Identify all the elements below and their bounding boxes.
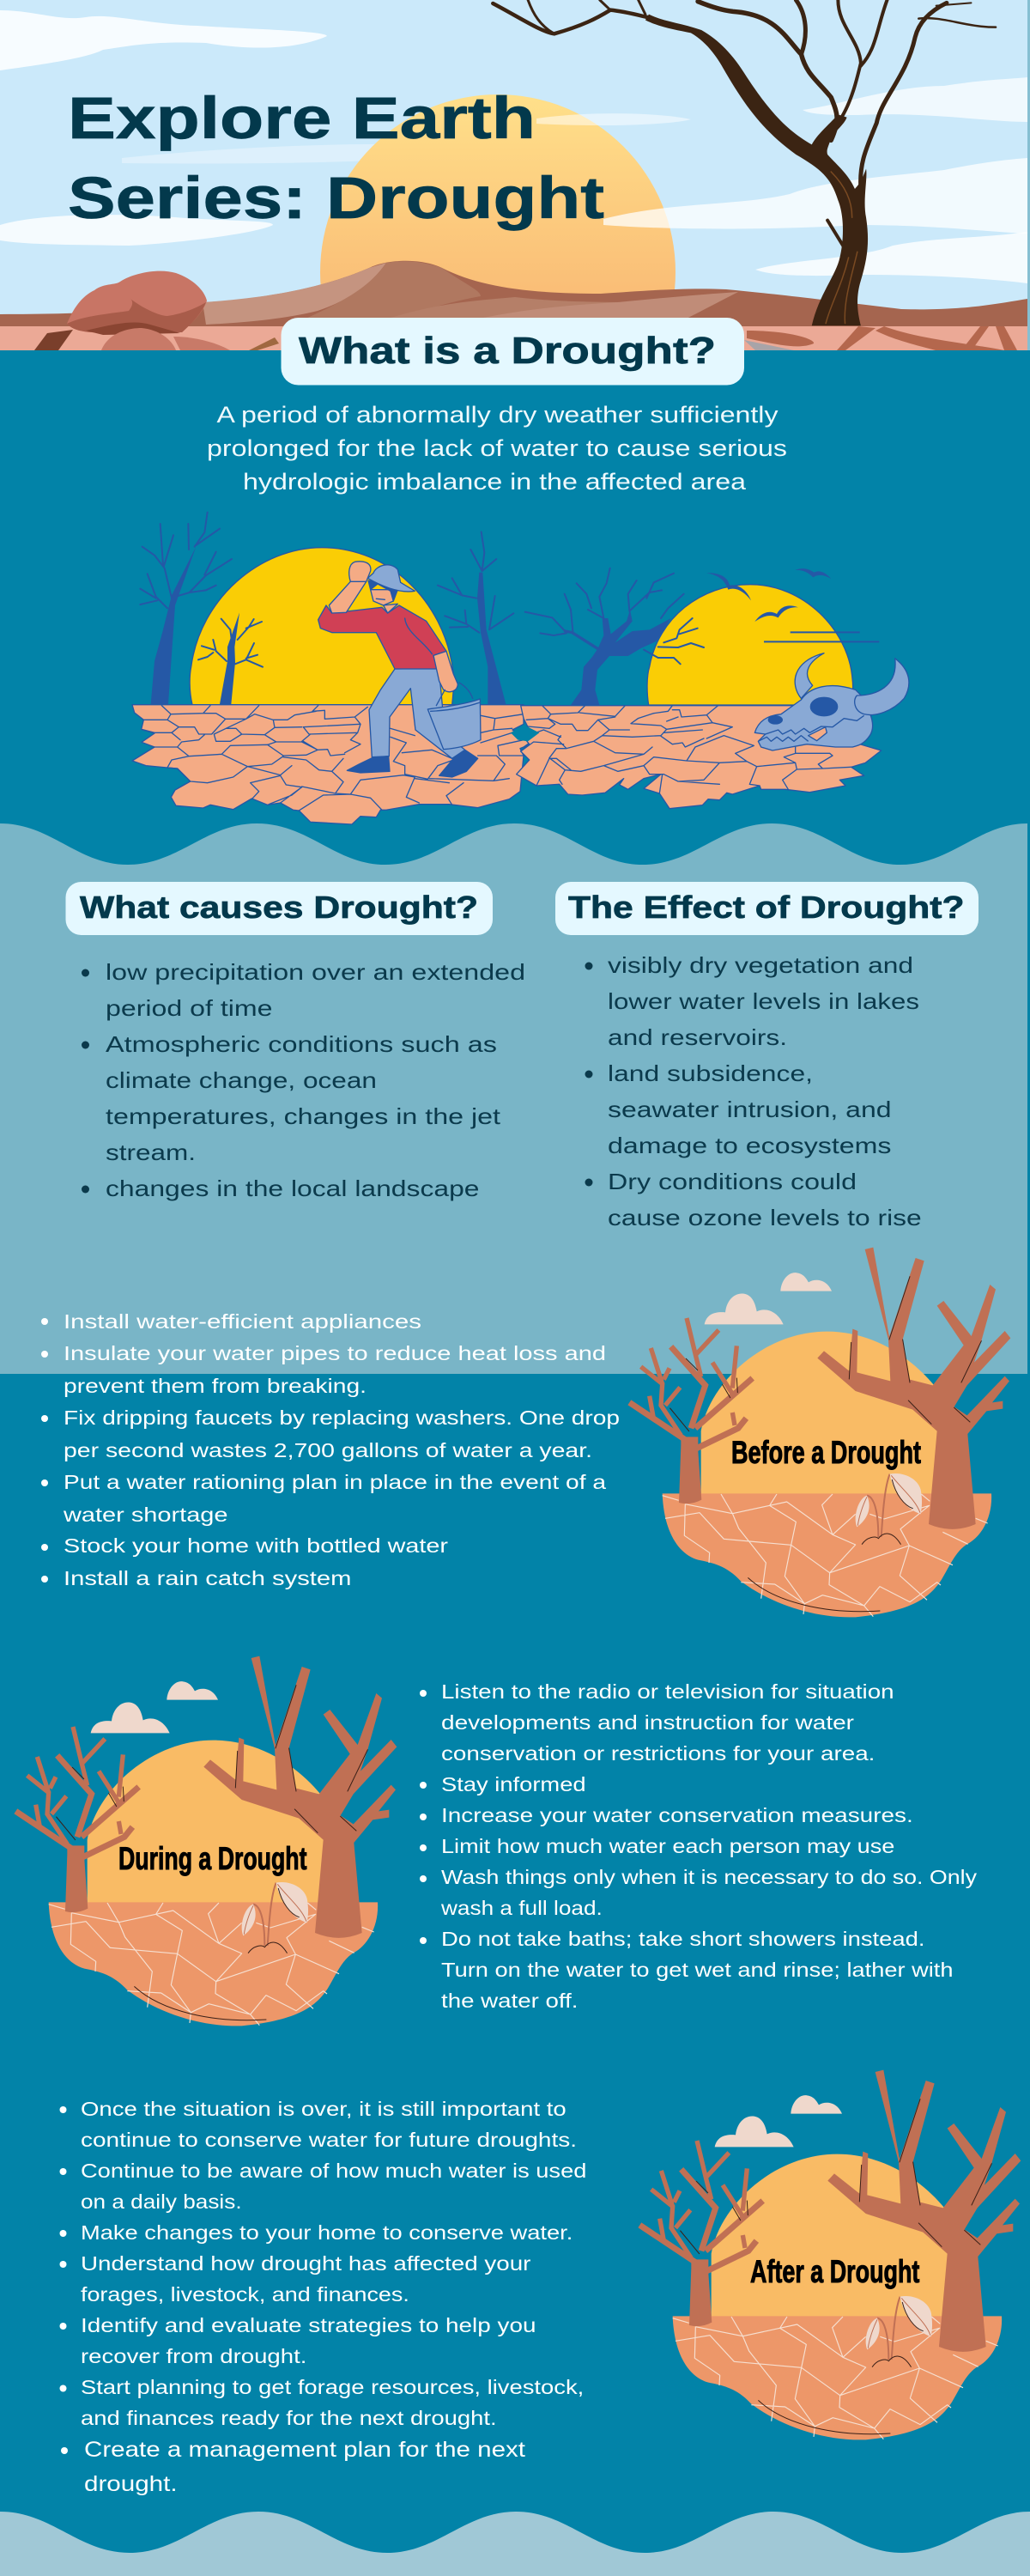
- cracked ground left: [132, 705, 532, 824]
- cow skull: [754, 653, 909, 750]
- heading pill: What is a Drought?: [282, 318, 744, 385]
- list: before a drought: Install a rain catch system: [64, 1567, 351, 1589]
- list: after a drought: Create a management plan for the next: [84, 2438, 525, 2462]
- heading pill: The Effect of Drought?: [555, 882, 978, 935]
- list: effects of drought: seawater intrusion, and: [608, 1097, 891, 1122]
- illustration: during a drought: During a Drought: [118, 1841, 307, 1876]
- list: after a drought: Once the situation is over, it is still important to: [81, 2098, 566, 2120]
- list: before a drought: Stock your home with bottled water: [64, 1534, 448, 1557]
- list: during a drought: Wash things only when it is necessary to do so. Only: [441, 1866, 978, 1888]
- illustration: before a drought: [629, 1248, 1010, 1617]
- header edge strip: [1027, 0, 1030, 350]
- list: during a drought: the water off.: [441, 1990, 579, 2012]
- birds and wind lines: [706, 568, 879, 641]
- list: during a drought: wash a full load.: [440, 1897, 603, 1919]
- bare trees left: [140, 513, 513, 704]
- illustration: during a drought: [15, 1656, 397, 2026]
- list: before a drought: water shortage: [63, 1504, 227, 1526]
- list: during a drought: Do not take baths; take short showers instead.: [441, 1928, 925, 1950]
- rocks: [67, 271, 207, 332]
- list: before a drought: Insulate your water pipes to reduce heat loss and: [64, 1342, 606, 1364]
- man with bucket: [318, 562, 481, 777]
- list: causes of drought: Atmospheric conditions such as: [106, 1031, 497, 1057]
- list: effects of drought: damage to ecosystems: [608, 1133, 891, 1158]
- dead tree: [493, 0, 996, 325]
- list: after a drought: Start planning to get forage resources, livestock,: [81, 2376, 584, 2398]
- heading pill: What causes Drought?: What causes Drought?: [80, 890, 478, 925]
- header illustration: desert landscape: [0, 0, 1027, 350]
- list: causes of drought: climate change, ocean: [106, 1067, 377, 1093]
- list: after a drought: forages, livestock, and finances.: [81, 2283, 409, 2306]
- list: before a drought: prevent them from breaking.: [64, 1375, 367, 1397]
- left sun: [190, 548, 453, 705]
- list: effects of drought: lower water levels in lakes: [608, 988, 919, 1014]
- list: effects of drought: cause ozone levels to rise: [608, 1205, 922, 1230]
- bare tree right: [525, 568, 704, 705]
- list: after a drought: drought.: [84, 2472, 178, 2496]
- list: after a drought: on a daily basis.: [81, 2190, 242, 2213]
- definition text: hydrologic imbalance in the affected area: [243, 469, 747, 495]
- list: before a drought: Put a water rationing plan in place in the event of a: [64, 1471, 606, 1493]
- illustration: man walking on cracked earth: [132, 513, 909, 824]
- list: effects of drought: and reservoirs.: [608, 1024, 787, 1050]
- list: causes of drought: period of time: [106, 995, 273, 1021]
- list: during a drought: [420, 1680, 978, 2012]
- bottom wave: [0, 2512, 1030, 2576]
- definition text: A period of abnormally dry weather sufficiently: [216, 402, 779, 428]
- list: effects of drought: Dry conditions could: [608, 1169, 857, 1194]
- right sun: [647, 585, 853, 705]
- header sun: [320, 94, 676, 294]
- list: before a drought: per second wastes 2,700 gallons of water a year.: [64, 1439, 592, 1461]
- hills: [0, 261, 1027, 331]
- list: after a drought: continue to conserve water for future droughts.: [81, 2129, 577, 2151]
- list: effects of drought: visibly dry vegetation and: [608, 952, 913, 978]
- list: after a drought: recover from drought.: [81, 2345, 306, 2367]
- cracked foreground: [0, 326, 1027, 350]
- list: causes of drought: [82, 959, 525, 1201]
- list: before a drought: Install water-efficient appliances: [64, 1310, 421, 1333]
- list: after a drought: and finances ready for the next drought.: [81, 2407, 497, 2429]
- list: before a drought: Fix dripping faucets by replacing washers. One drop: [64, 1406, 620, 1429]
- title: Series: Drought: [68, 165, 604, 231]
- list: causes of drought: changes in the local landscape: [106, 1176, 479, 1201]
- list: after a drought: Understand how drought has affected your: [81, 2252, 531, 2275]
- list: before a drought: [41, 1310, 620, 1589]
- list: causes of drought: stream.: [106, 1139, 196, 1165]
- list: effects of drought: [585, 952, 922, 1230]
- list: causes of drought: low precipitation over an extended: [106, 959, 525, 985]
- list: during a drought: Increase your water conservation measures.: [441, 1804, 913, 1826]
- list: after a drought: Continue to be aware of how much water is used: [81, 2160, 586, 2182]
- definition text: [207, 402, 787, 495]
- heading pill: What is a Drought?: What is a Drought?: [299, 330, 716, 372]
- list: during a drought: conservation or restrictions for your area.: [441, 1742, 875, 1765]
- definition text: prolonged for the lack of water to cause serious: [207, 435, 787, 461]
- list: during a drought: Listen to the radio or television for situation: [441, 1680, 894, 1703]
- list: during a drought: Stay informed: [441, 1773, 586, 1795]
- list: causes of drought: temperatures, changes in the jet: [106, 1103, 501, 1129]
- list: after a drought: [60, 2098, 586, 2496]
- illustration: after a drought: After a Drought: [750, 2254, 919, 2289]
- light wave panel: causes and effects: [0, 823, 1027, 1374]
- heading pill: What causes Drought?: [65, 882, 493, 935]
- list: during a drought: Limit how much water each person may use: [441, 1835, 894, 1857]
- title: [68, 85, 604, 231]
- list: during a drought: developments and instruction for water: [441, 1711, 854, 1734]
- list: after a drought: Identify and evaluate strategies to help you: [81, 2314, 536, 2336]
- title: Explore Earth: [68, 85, 536, 151]
- illustration: after a drought: [639, 2070, 1021, 2439]
- heading pill: The Effect of Drought?: The Effect of Drought?: [568, 890, 965, 925]
- list: effects of drought: land subsidence,: [608, 1060, 813, 1086]
- cracked ground right: [511, 706, 882, 809]
- list: after a drought: Make changes to your home to conserve water.: [81, 2221, 573, 2244]
- list: during a drought: Turn on the water to get wet and rinse; lather with: [441, 1959, 953, 1981]
- illustration: before a drought: Before a Drought: [731, 1435, 921, 1470]
